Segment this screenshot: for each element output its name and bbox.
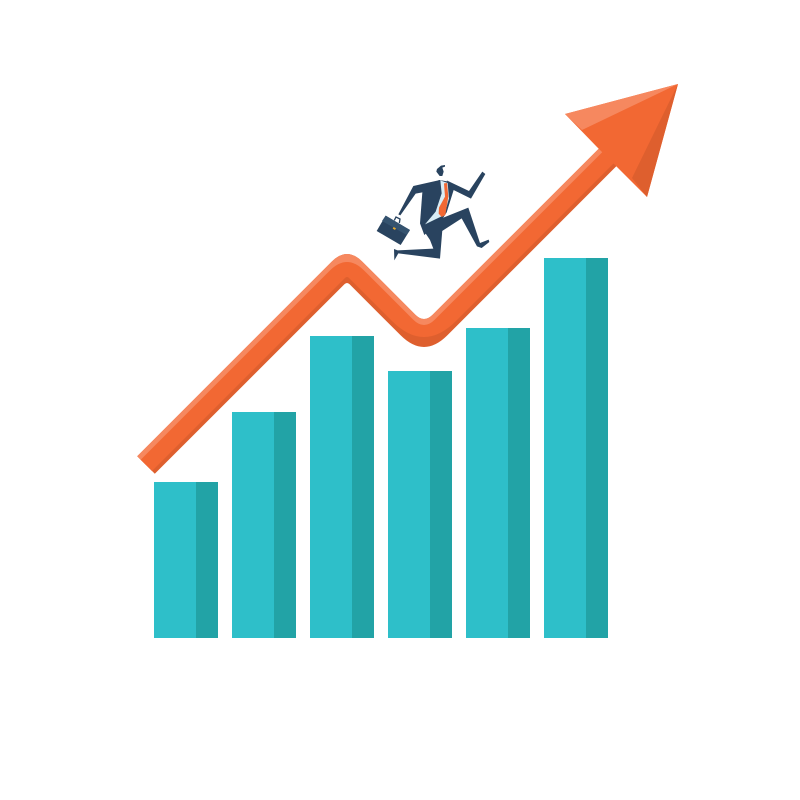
- running businessman: [377, 165, 489, 260]
- front arm: [447, 172, 485, 199]
- bar 4: [388, 371, 452, 638]
- briefcase clasp: [393, 227, 396, 230]
- torso jacket: [420, 180, 454, 235]
- bar 6: [544, 258, 608, 638]
- bar chart: [154, 258, 608, 638]
- bar 3: [310, 336, 374, 638]
- arrow head: [565, 84, 678, 197]
- arrow shaft shadow band: [137, 148, 617, 474]
- shirt: [425, 180, 449, 224]
- briefcase: [377, 216, 410, 245]
- arrow shaft highlight band: [137, 148, 608, 465]
- necktie: [439, 183, 448, 217]
- front leg: [425, 208, 489, 248]
- rear arm: [398, 180, 443, 215]
- head and hair: [436, 165, 445, 176]
- bar 1: [154, 482, 218, 638]
- rear leg: [394, 230, 442, 260]
- bar 5: [466, 328, 530, 638]
- arrow: orange zigzag rising line: [137, 148, 617, 474]
- arrow shaft main band: [141, 152, 614, 471]
- bar 2: [232, 412, 296, 638]
